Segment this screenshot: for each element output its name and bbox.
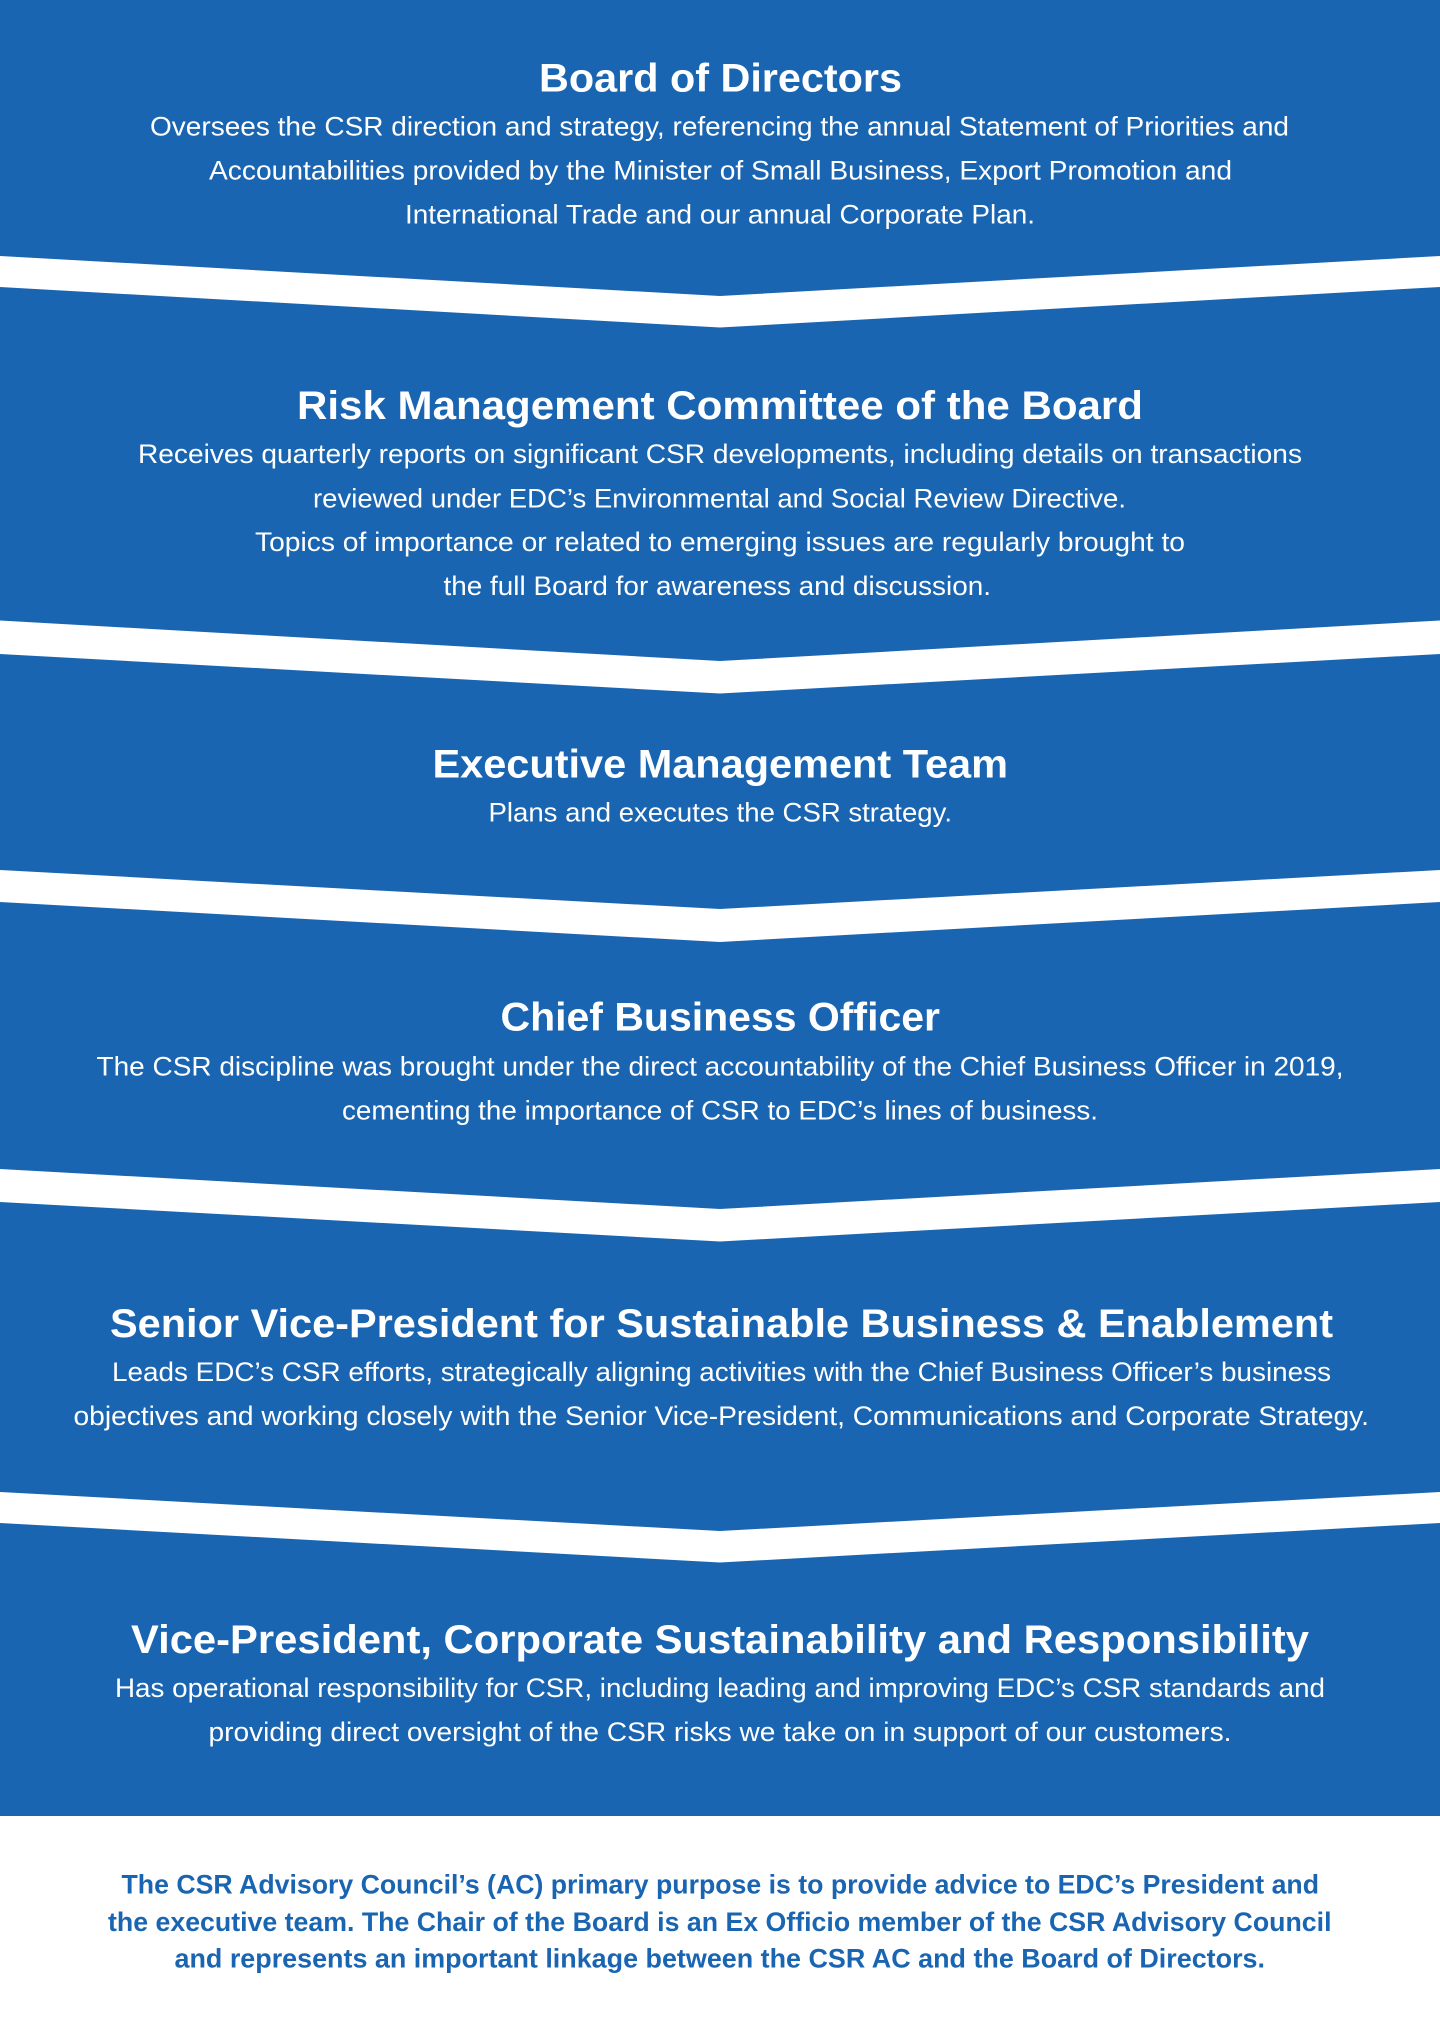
callout: CSR Advisory Council: the executive team. The Chair of the Board is an Ex Officio member of the CSR Advisory Council <box>108 1907 1332 1937</box>
panel: Senior Vice-President <box>74 1302 1369 1431</box>
text block: International Trade and our annual Corporate Plan. <box>405 200 1035 230</box>
text block: the full Board for awareness and discussion. <box>444 571 991 601</box>
heading: Executive Management Team <box>432 742 1008 786</box>
text block: objectives and working closely with the Senior Vice-President, Communications and Corporate Strategy. <box>74 1401 1369 1431</box>
text block: Receives quarterly reports on significant CSR developments, including details on transactions <box>138 439 1302 469</box>
heading: Vice-President, Corporate Sustainability and Responsibility <box>131 1618 1310 1662</box>
panel: Vice-President, Corporate Sustainability <box>115 1618 1325 1747</box>
panel: Risk Management Committee <box>138 384 1302 601</box>
callout: CSR Advisory Council: and represents an important linkage between the CSR AC and the Board of Directors. <box>174 1944 1265 1974</box>
heading: Chief Business Officer <box>500 996 940 1040</box>
text block: Oversees the CSR direction and strategy, referencing the annual Statement of Priorities and <box>150 112 1289 142</box>
panel: Executive Management Team <box>432 742 1008 828</box>
text block: Accountabilities provided by the Minister of Small Business, Export Promotion and <box>209 156 1232 186</box>
text block <box>96 1052 1344 1126</box>
text block <box>74 1357 1369 1431</box>
text block: cementing the importance of CSR to EDC’s lines of business. <box>342 1096 1098 1126</box>
text block: Plans and executes the CSR strategy. <box>488 798 952 828</box>
heading: Risk Management Committee of the Board <box>297 384 1143 428</box>
text block: Leads EDC’s CSR efforts, strategically aligning activities with the Chief Business Officer’s business <box>112 1357 1331 1387</box>
callout: CSR Advisory Council: The CSR Advisory Council’s (AC) primary purpose is to provide advice to EDC’s President and <box>122 1870 1319 1900</box>
text block <box>115 1673 1325 1747</box>
panel: Board of Directors <box>150 56 1289 230</box>
text block: reviewed under EDC’s Environmental and Social Review Directive. <box>313 484 1126 514</box>
panel: Chief Business Officer <box>96 996 1344 1126</box>
text block: providing direct oversight of the CSR risks we take on in support of our customers. <box>208 1717 1232 1747</box>
heading: Board of Directors <box>539 56 902 100</box>
text block <box>150 112 1289 230</box>
text block: Has operational responsibility for CSR, including leading and improving EDC’s CSR standards and <box>115 1673 1325 1703</box>
text block: The CSR discipline was brought under the direct accountability of the Chief Business Officer in 2019, <box>96 1052 1344 1082</box>
text block: Topics of importance or related to emerging issues are regularly brought to <box>255 527 1185 557</box>
heading: Senior Vice-President for Sustainable Business & Enablement <box>110 1302 1333 1346</box>
callout: CSR Advisory Council <box>108 1870 1332 1974</box>
text block <box>138 439 1302 601</box>
